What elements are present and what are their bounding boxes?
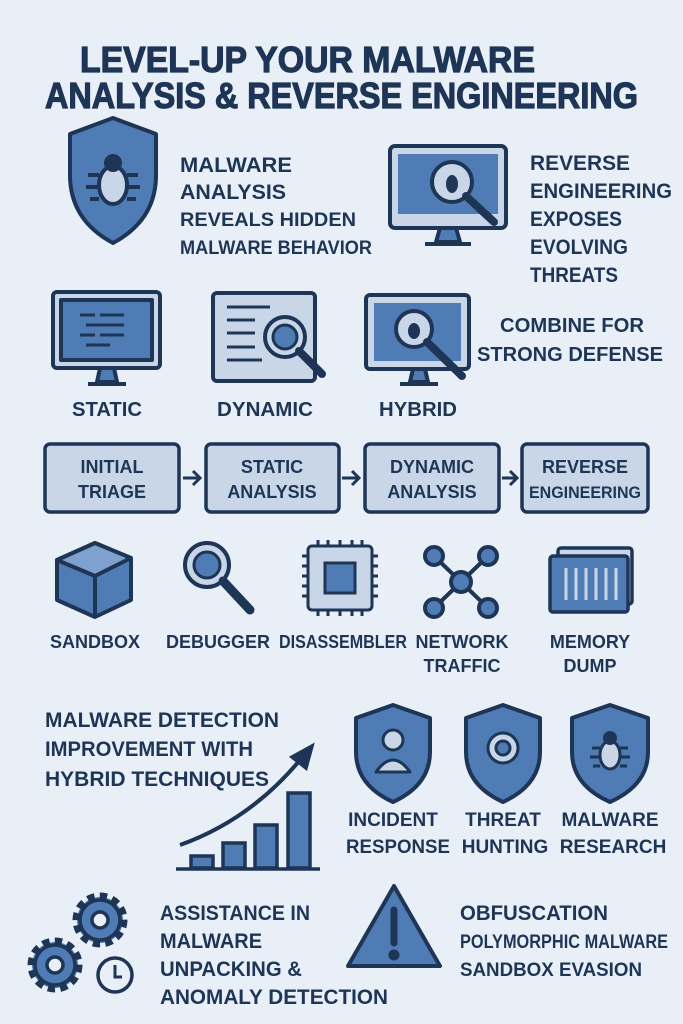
- icon: shield target: [466, 705, 540, 802]
- label: memory dump: MEMORY: [550, 632, 630, 652]
- step: static analysis: ANALYSIS: [227, 482, 317, 502]
- text: malware analysis: MALWARE: [180, 154, 292, 177]
- step: static analysis: [206, 444, 339, 512]
- icon: shield bug: [70, 118, 156, 243]
- label: network traffic: [416, 632, 508, 676]
- icon: static monitor: [53, 292, 160, 384]
- icon: memory dump: [550, 548, 632, 612]
- label: threat hunting: THREAT: [465, 810, 541, 831]
- label: sandbox: SANDBOX: [50, 632, 140, 652]
- arrow: [342, 471, 359, 485]
- icon: warning triangle: [348, 886, 440, 966]
- step: reverse engineering: ENGINEERING: [529, 483, 641, 502]
- step: static analysis: STATIC: [241, 457, 303, 477]
- text: reverse engineering: ENGINEERING: [530, 180, 672, 203]
- text: assistance: ANOMALY DETECTION: [160, 986, 388, 1009]
- step: reverse engineering: [522, 444, 648, 512]
- arrow: [183, 471, 200, 485]
- label: debugger: DEBUGGER: [166, 632, 270, 652]
- label: disassembler: DISASSEMBLER: [279, 632, 407, 652]
- step: initial triage: TRIAGE: [78, 482, 146, 502]
- text: reverse engineering: EXPOSES: [530, 208, 622, 231]
- text: detection improvement: [45, 709, 279, 791]
- text: malware analysis: MALWARE BEHAVIOR: [180, 238, 372, 259]
- label: incident response: [346, 810, 450, 858]
- step: dynamic analysis: [365, 444, 499, 512]
- text: reverse engineering: THREATS: [530, 264, 618, 287]
- icon: debugger magnifier: [185, 543, 250, 610]
- text: assistance: [160, 902, 388, 1009]
- label: hybrid: HYBRID: [379, 399, 457, 421]
- step: dynamic analysis: ANALYSIS: [387, 482, 477, 502]
- label: malware research: [560, 810, 666, 858]
- text: detection improvement: IMPROVEMENT WITH: [45, 738, 253, 761]
- text: detection improvement: MALWARE DETECTION: [45, 709, 279, 732]
- step: dynamic analysis: DYNAMIC: [390, 457, 474, 477]
- icon: network: [425, 547, 497, 617]
- text: obfuscation: OBFUSCATION: [460, 902, 608, 925]
- text: malware analysis: ANALYSIS: [180, 181, 286, 204]
- text: combine for strong defense: [477, 315, 663, 366]
- label: dynamic: DYNAMIC: [217, 399, 313, 421]
- label: threat hunting: [462, 810, 548, 858]
- label: incident response: INCIDENT: [348, 810, 438, 831]
- text: reverse engineering: [530, 152, 672, 287]
- label: network traffic: TRAFFIC: [424, 656, 500, 676]
- label: memory dump: DUMP: [564, 656, 616, 676]
- label: network traffic: NETWORK: [416, 632, 508, 652]
- text: obfuscation: [460, 902, 668, 981]
- icon: disassembler chip: [302, 540, 378, 616]
- icon: shield person: [356, 705, 430, 802]
- label: malware research: RESEARCH: [560, 837, 666, 858]
- text: malware analysis: REVEALS HIDDEN: [180, 210, 356, 231]
- text: combine for strong defense: COMBINE FOR: [500, 315, 645, 337]
- title: LEVEL-UP YOUR MALWARE: [80, 39, 535, 80]
- label: malware research: MALWARE: [561, 810, 659, 831]
- text: reverse engineering: REVERSE: [530, 152, 630, 175]
- text: combine for strong defense: STRONG DEFENSE: [477, 344, 663, 366]
- text: assistance: MALWARE: [160, 930, 262, 953]
- text: reverse engineering: EVOLVING: [530, 236, 628, 259]
- icon: monitor with magnifier bug: [390, 146, 506, 244]
- icon: hybrid monitor: [366, 295, 469, 384]
- text: assistance: UNPACKING &: [160, 958, 302, 981]
- icon: shield bug: [572, 705, 648, 802]
- label: memory dump: [550, 632, 630, 676]
- flow: process steps: [45, 444, 648, 512]
- arrow: [502, 471, 517, 485]
- step: reverse engineering: REVERSE: [542, 457, 628, 477]
- icon: gears and clock: [32, 897, 132, 992]
- text: obfuscation: SANDBOX EVASION: [460, 960, 642, 981]
- icon: sandbox cube: [57, 543, 131, 617]
- step: initial triage: [45, 444, 179, 512]
- text: assistance: ASSISTANCE IN: [160, 902, 310, 925]
- chart: growth bars: [176, 746, 320, 869]
- label: incident response: RESPONSE: [346, 837, 450, 858]
- title: [45, 39, 638, 116]
- label: static: STATIC: [72, 399, 142, 421]
- icon: dynamic document magnifier: [213, 293, 322, 381]
- label: threat hunting: HUNTING: [462, 837, 548, 858]
- text: malware analysis: [180, 154, 372, 259]
- step: initial triage: INITIAL: [80, 457, 144, 477]
- text: detection improvement: HYBRID TECHNIQUES: [45, 768, 269, 791]
